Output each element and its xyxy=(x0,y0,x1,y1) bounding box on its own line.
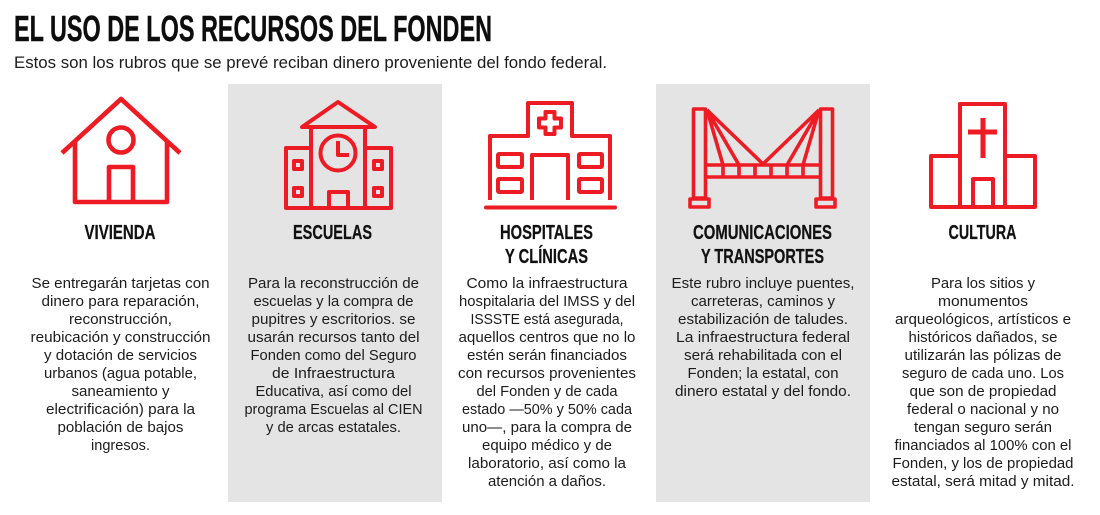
text: escuelas: escuelas y la compra de xyxy=(254,294,414,310)
text: escuelas: de Infraestructura xyxy=(272,366,396,382)
text: comunicaciones xyxy=(672,276,854,400)
text: cultura: Para los sitios y xyxy=(931,276,1036,292)
text: vivienda: y dotación de servicios xyxy=(44,348,197,364)
text: cultura: monumentos xyxy=(938,294,1028,310)
text: vivienda: Se entregarán tarjetas con xyxy=(32,276,210,292)
heading: comunicaciones: Y TRANSPORTES xyxy=(701,245,824,268)
panel: comunicaciones xyxy=(672,109,854,400)
icon: church xyxy=(931,104,1035,207)
heading: comunicaciones: COMUNICACIONES xyxy=(693,221,832,244)
text: cultura: tengan seguro serán xyxy=(914,420,1052,436)
panel: comunicaciones background xyxy=(656,84,870,502)
panel: escuelas background xyxy=(228,84,442,502)
text: cultura: utilizarán las pólizas de xyxy=(904,348,1062,364)
text: cultura: históricos dañados, se xyxy=(908,330,1058,346)
text: hospitales: con recursos provenientes xyxy=(458,366,636,382)
panel: escuelas xyxy=(244,102,422,436)
text: hospitales: uno—, para la compra de xyxy=(462,420,632,436)
text: escuelas: y de arcas estatales. xyxy=(266,420,401,436)
text: cultura: seguro de cada uno. Los xyxy=(902,366,1064,382)
text: comunicaciones: dinero estatal y del fondo. xyxy=(675,384,851,400)
text: escuelas: Fonden como del Seguro xyxy=(250,348,416,364)
subtitle: Estos son los rubros que se prevé reciban dinero proveniente del fondo federal. xyxy=(14,54,607,72)
text: hospitales: hospitalaria del IMSS y del xyxy=(459,294,635,310)
text: hospitales: estado —50% y 50% cada xyxy=(462,402,633,418)
text: hospitales: aquellos centros que no lo xyxy=(458,330,636,346)
icon: school xyxy=(286,102,391,208)
text: hospitales: estén serán financiados xyxy=(467,348,627,364)
heading: hospitales xyxy=(500,221,593,268)
text: comunicaciones: Fonden; la estatal, con xyxy=(688,366,838,382)
text: cultura: Fonden, y los de propiedad xyxy=(892,456,1074,472)
text: hospitales: del Fonden y de cada xyxy=(476,384,618,400)
text: vivienda: electrificación) para la xyxy=(46,402,196,418)
heading: escuelas: ESCUELAS xyxy=(293,221,372,244)
heading: hospitales: HOSPITALES xyxy=(500,221,593,244)
text: hospitales: atención a daños. xyxy=(488,474,606,490)
text: vivienda: urbanos (agua potable, xyxy=(44,366,197,382)
panel: hospitales xyxy=(458,103,636,490)
text: escuelas: usarán recursos tanto del xyxy=(248,330,420,346)
text: cultura: federal o nacional y no xyxy=(907,402,1059,418)
panel: vivienda xyxy=(30,99,210,454)
text: comunicaciones: carreteras, caminos y xyxy=(691,294,836,310)
text: comunicaciones: será rehabilitada con el xyxy=(684,348,842,364)
text: vivienda: población de bajos xyxy=(58,420,184,436)
text: vivienda: dinero para reparación, xyxy=(42,294,200,310)
text: hospitales: equipo médico y de xyxy=(482,438,612,454)
text: vivienda: ingresos. xyxy=(91,438,150,454)
text: cultura: arqueológicos, artísticos e xyxy=(895,312,1071,328)
text: escuelas: programa Escuelas al CIEN xyxy=(244,402,422,418)
text: comunicaciones: estabilización de taludes. xyxy=(678,312,848,328)
text: vivienda xyxy=(30,276,210,454)
text: cultura xyxy=(892,276,1074,490)
text: cultura: que son de propiedad xyxy=(910,384,1056,400)
text: cultura: estatal, será mitad y mitad. xyxy=(892,474,1074,490)
text: hospitales: Como la infraestructura xyxy=(466,276,628,292)
text: vivienda: reubicación y construcción xyxy=(30,330,210,346)
icon: bridge xyxy=(690,109,835,207)
text: escuelas: pupitres y escritorios. se xyxy=(252,312,416,328)
text: hospitales xyxy=(458,276,636,490)
icon: hospital xyxy=(486,103,615,208)
title: EL USO DE LOS RECURSOS DEL FONDEN xyxy=(14,8,492,49)
text: vivienda: reconstrucción, xyxy=(69,312,172,328)
text: escuelas: Para la reconstrucción de xyxy=(248,276,419,292)
heading: cultura: CULTURA xyxy=(948,221,1017,244)
text: escuelas: Educativa, así como del xyxy=(256,384,412,400)
text: cultura: financiados al 100% con el xyxy=(894,438,1072,454)
text: hospitales: ISSSTE está asegurada, xyxy=(470,312,624,328)
icon: house xyxy=(62,99,180,202)
text: escuelas xyxy=(244,276,422,436)
heading: hospitales: Y CLÍNICAS xyxy=(505,245,588,268)
heading: vivienda: VIVIENDA xyxy=(84,221,156,244)
panel: cultura xyxy=(892,104,1074,490)
heading: comunicaciones xyxy=(693,221,832,268)
text: hospitales: laboratorio, así como la xyxy=(468,456,627,472)
text: comunicaciones: La infraestructura federal xyxy=(676,330,850,346)
text: vivienda: saneamiento y xyxy=(72,384,170,400)
text: comunicaciones: Este rubro incluye puentes, xyxy=(672,276,854,292)
